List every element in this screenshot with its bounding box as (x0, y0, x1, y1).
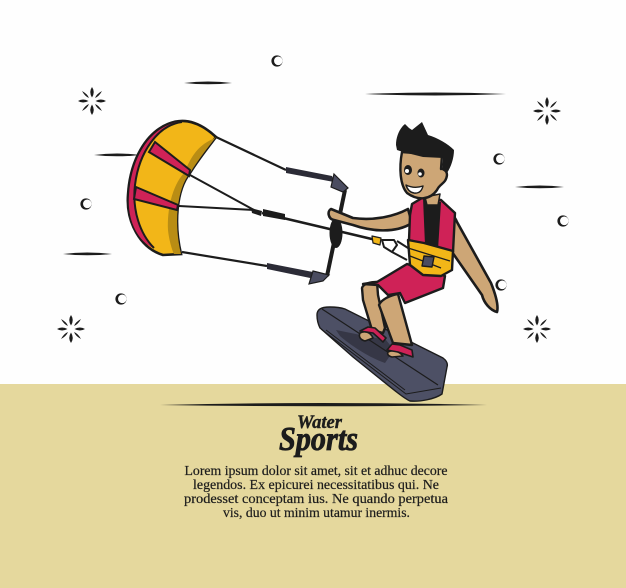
body text: vis, duo ut minim utamur inermis. (223, 505, 410, 520)
kite canopy (128, 121, 216, 255)
body text: Lorem ipsum dolor sit amet, sit et adhuc decore (184, 463, 448, 478)
title: Water (297, 412, 343, 433)
sand panel (0, 384, 626, 588)
harness loop (372, 236, 381, 245)
mouth (406, 185, 423, 193)
belt (408, 240, 453, 276)
decorative stars (57, 87, 561, 343)
kitesurfer figure (329, 122, 498, 357)
horizon line (160, 403, 487, 406)
body text: legendos. Ex epicurei necessitatibus qui. Ne (193, 477, 439, 492)
background sky (0, 0, 626, 385)
shorts (363, 264, 445, 303)
wind dashes (63, 82, 564, 255)
surfboard (317, 307, 447, 401)
decorative circles (80, 55, 569, 305)
far arm and hand (329, 209, 412, 230)
body text (184, 463, 448, 520)
feet and shoes (359, 332, 373, 341)
vest (409, 198, 455, 252)
eyes (404, 165, 424, 178)
near arm (442, 213, 498, 312)
body text: prodesset conceptam ius. Ne quando perpetua (184, 491, 448, 506)
neck (425, 194, 440, 205)
kite lines and control bar (179, 137, 376, 284)
hair (396, 122, 454, 173)
legs (362, 282, 385, 333)
buckle (422, 256, 434, 267)
title: Sports (279, 421, 358, 458)
shirt (423, 198, 441, 250)
face (400, 152, 447, 198)
